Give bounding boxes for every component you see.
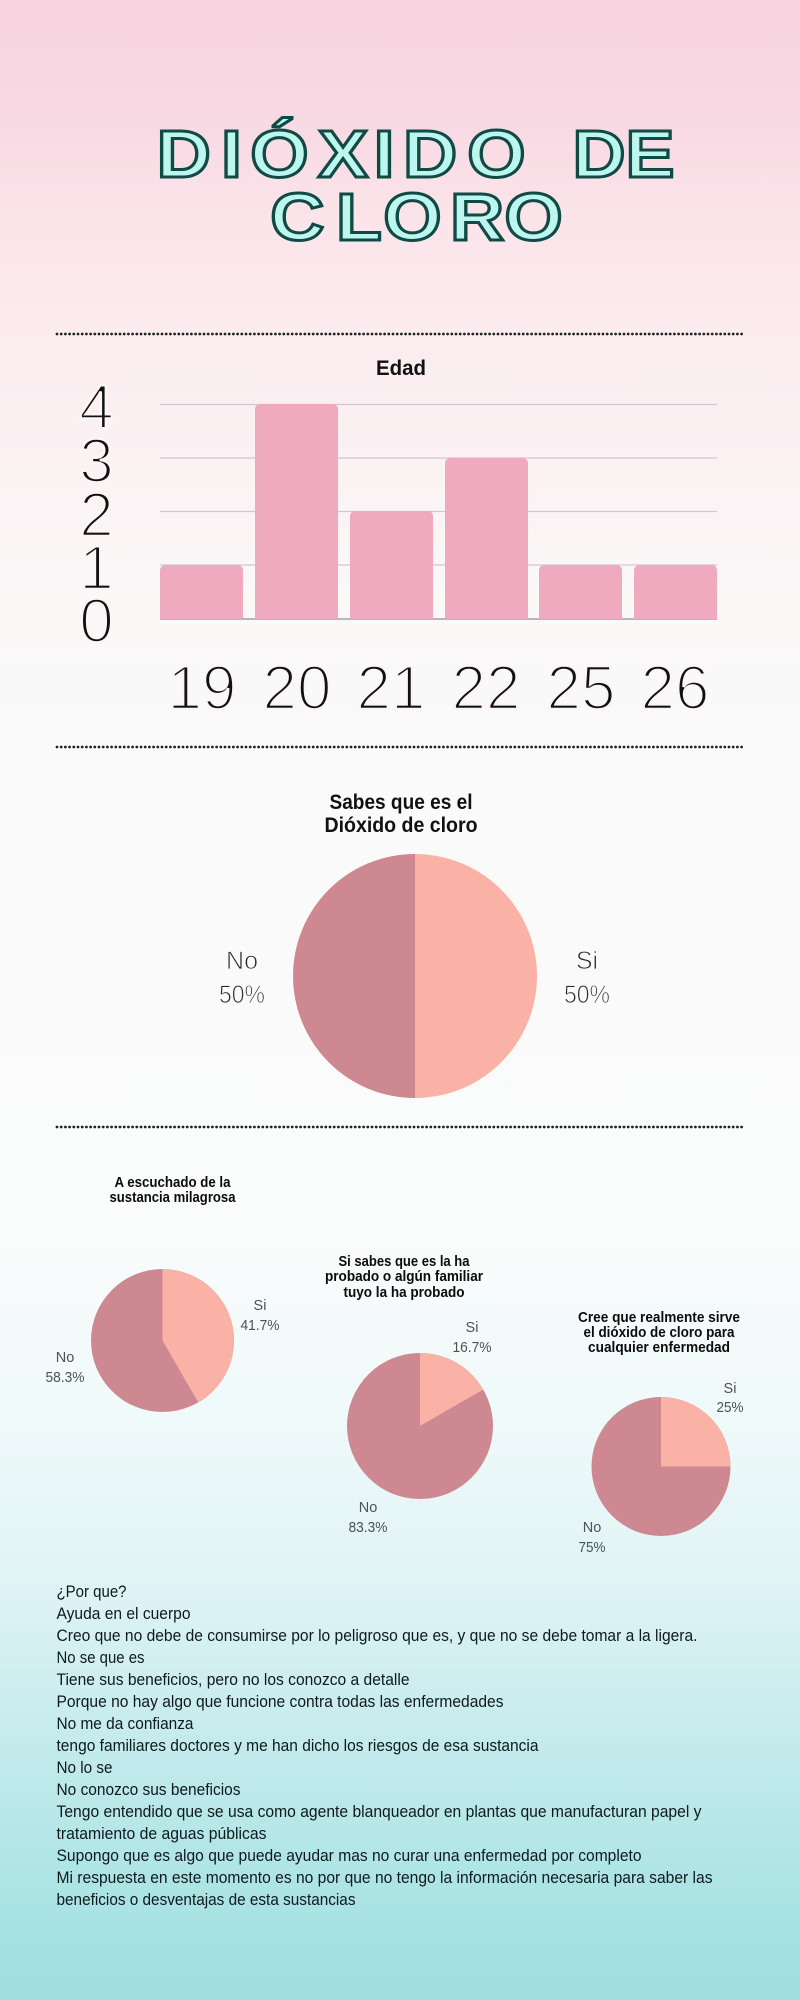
label: Si 41.7%: Si	[254, 1298, 266, 1314]
chart title: el dióxido de cloro para	[584, 1324, 735, 1341]
label: No 83.3%: 83.3%	[348, 1520, 388, 1536]
y axis labels: 0	[79, 587, 114, 656]
title: DIÓXIDO	[157, 118, 526, 192]
chart title: Si sabes que es la ha	[338, 1253, 470, 1270]
label: Si 25%: Si	[724, 1381, 736, 1397]
y axis labels: 1	[79, 534, 114, 603]
text block: ¿Por que? responses: Supongo que es algo que puede ayudar mas no curar una enfermedad por completo	[56, 1846, 642, 1865]
y axis labels: 2	[79, 481, 114, 550]
x axis labels: 19	[168, 654, 236, 723]
label: Si 50%	[564, 947, 610, 1009]
divider: top	[57, 333, 743, 335]
label: Si 16.7%: Si	[466, 1320, 478, 1336]
pie chart 16.7 / 83.3	[347, 1353, 493, 1499]
label: No 58.3%: 58.3%	[46, 1370, 85, 1386]
text block: ¿Por que? responses: No lo se	[56, 1758, 112, 1777]
text block: ¿Por que? responses: No me da confianza	[56, 1714, 194, 1733]
text block: ¿Por que? responses: Creo que no debe de consumirse por lo peligroso que es, y que no se debe tomar a la ligera.	[56, 1626, 698, 1645]
label: No 83.3%	[348, 1500, 388, 1536]
chart title: tuyo la ha probado	[344, 1284, 464, 1301]
x axis labels: 21	[357, 654, 425, 723]
panel: A escuchado de la sustancia milagrosa	[46, 1174, 280, 1412]
text block: ¿Por que? responses: No conozco sus beneficios	[56, 1780, 240, 1799]
text block: ¿Por que? responses: Porque no hay algo que funcione contra todas las enfermedades	[56, 1692, 504, 1711]
x axis labels: 22	[452, 654, 520, 723]
panel: Cree que realmente sirve	[578, 1309, 744, 1556]
pie title: Dióxido de cloro	[324, 814, 478, 837]
pie title: Sabes que es el	[330, 791, 472, 814]
label: No 50%	[219, 947, 265, 1009]
title: DE	[572, 117, 674, 192]
y axis labels: 3	[79, 427, 114, 496]
text block: ¿Por que? responses: beneficios o desventajas de esta sustancias	[56, 1890, 356, 1909]
divider: lower	[57, 1126, 743, 1128]
label: No 58.3%	[46, 1350, 85, 1386]
pie chart 50/50	[293, 854, 537, 1098]
text block: ¿Por que? responses: No se que es	[56, 1648, 144, 1667]
x axis labels: 25	[547, 654, 615, 723]
text block: ¿Por que? responses: Mi respuesta en este momento es no por que no tengo la información necesaria para saber las	[56, 1868, 712, 1887]
text block: ¿Por que? responses: Tengo entendido que se usa como agente blanqueador en plantas que manufacturan papel y	[56, 1802, 702, 1821]
chart title	[325, 1253, 483, 1301]
chart title: A escuchado de la	[114, 1174, 231, 1191]
panel: Si sabes que es la ha probado	[325, 1253, 493, 1536]
text block: ¿Por que? responses: Ayuda en el cuerpo	[56, 1604, 190, 1623]
label: Si 41.7%	[240, 1298, 280, 1334]
text block: ¿Por que? responses: tratamiento de aguas públicas	[56, 1824, 266, 1843]
text block: ¿Por que? responses	[56, 1582, 712, 1909]
chart title: probado o algún familiar	[325, 1268, 483, 1285]
title	[157, 117, 675, 255]
text block: ¿Por que? responses: ¿Por que?	[56, 1582, 126, 1601]
label: No 75%	[578, 1520, 606, 1556]
pie chart 25 / 75	[592, 1397, 730, 1536]
x axis labels: 26	[641, 654, 709, 723]
chart title	[578, 1309, 740, 1356]
label: Si 50%: Si	[576, 947, 598, 975]
chart title: Cree que realmente sirve	[578, 1309, 740, 1326]
label: No 83.3%: No	[359, 1500, 377, 1516]
chart title: Edad: Edad	[376, 357, 426, 380]
label: Si 25%: 25%	[716, 1400, 744, 1416]
x axis labels: 20	[263, 654, 331, 723]
pie chart 41.7 / 58.3	[91, 1269, 234, 1412]
pie title	[324, 791, 478, 837]
chart title	[110, 1174, 236, 1206]
bar chart: Edad	[79, 357, 717, 723]
label: No 50%: No	[226, 947, 258, 975]
divider: middle	[57, 746, 743, 748]
label: No 58.3%: No	[56, 1350, 74, 1366]
bars	[160, 404, 717, 619]
x axis labels	[168, 654, 709, 723]
label: No 75%: No	[583, 1520, 601, 1536]
y axis labels	[79, 373, 114, 656]
chart title: cualquier enfermedad	[588, 1339, 730, 1356]
chart title: sustancia milagrosa	[110, 1189, 236, 1206]
label: Si 16.7%: 16.7%	[452, 1340, 492, 1356]
label: No 50%: 50%	[219, 981, 265, 1009]
text block: ¿Por que? responses: tengo familiares doctores y me han dicho los riesgos de esa sustancia	[56, 1736, 539, 1755]
label: No 75%: 75%	[578, 1540, 606, 1556]
label: Si 25%	[716, 1381, 744, 1416]
label: Si 50%: 50%	[564, 981, 610, 1009]
pie panel: Sabes que es el Dióxido de cloro	[219, 791, 610, 1098]
title: CLORO	[270, 181, 563, 255]
y axis labels: 4	[79, 373, 114, 442]
label: Si 41.7%: 41.7%	[240, 1318, 280, 1334]
grid lines	[160, 404, 717, 619]
label: Si 16.7%	[452, 1320, 492, 1356]
text block: ¿Por que? responses: Tiene sus beneficios, pero no los conozco a detalle	[56, 1670, 410, 1689]
